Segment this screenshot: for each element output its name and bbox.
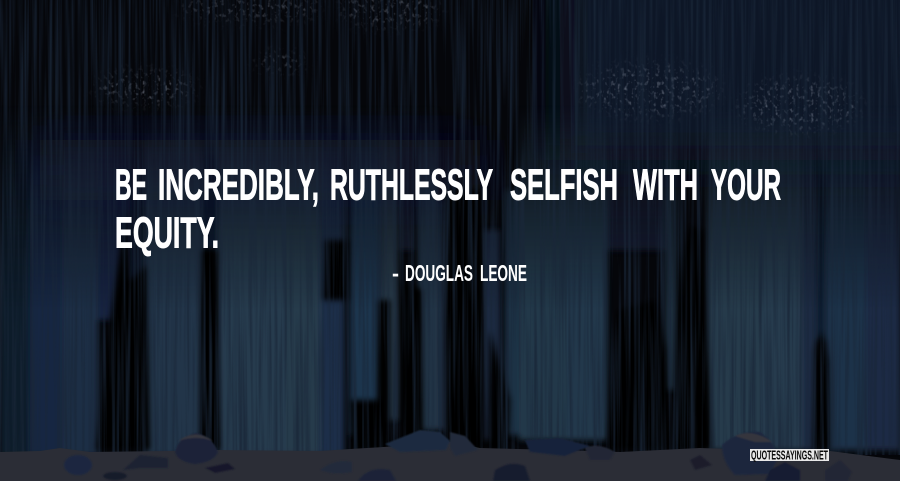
snowy ground: [0, 442, 900, 481]
watermark: QuoteSayings.net badge: [750, 448, 829, 462]
attribution: LEONE: [480, 260, 527, 286]
quote text: EQUITY.: [115, 208, 219, 258]
quote text: [115, 160, 781, 258]
dark crevices between columns: [96, 190, 830, 450]
attribution: -: [392, 260, 399, 286]
rocks along the base of the ice: [64, 430, 852, 481]
quote text: SELFISH: [510, 160, 618, 210]
watermark: QuoteSayings.net badge: QUOTESSAYINGS.NET: [751, 448, 828, 462]
quote text: RUTHLESSLY: [330, 160, 493, 210]
quote text: BE: [115, 160, 147, 210]
quote text: YOUR: [711, 160, 781, 210]
quote text: INCREDIBLY,: [158, 160, 319, 210]
background: frozen icicle columns: [0, 100, 900, 455]
attribution: DOUGLAS: [405, 260, 473, 286]
cliff texture specks: [94, 0, 861, 136]
quote text: WITH: [633, 160, 698, 210]
